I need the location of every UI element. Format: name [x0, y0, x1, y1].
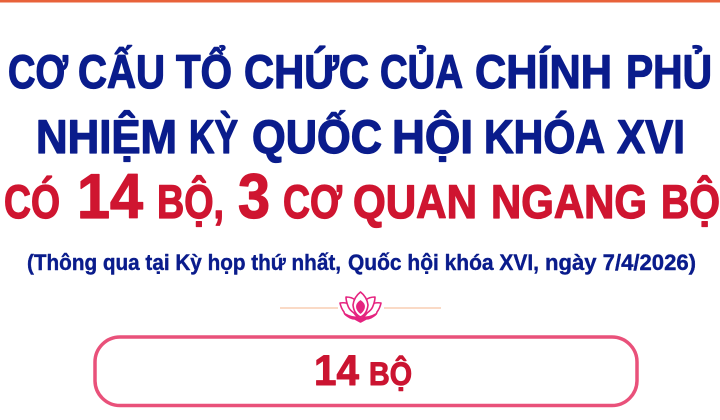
- icon: lotus: [340, 292, 381, 322]
- title line 1: CẤU: [78, 45, 165, 98]
- title line 2: XVI: [617, 110, 685, 163]
- title line 1: TỔ: [176, 45, 232, 98]
- top accent bar: [0, 0, 720, 2]
- title line 2: QUỐC: [252, 110, 382, 163]
- title line 3: ministries count: CƠ: [283, 175, 343, 228]
- panel: 14 ministries heading box: [95, 337, 637, 406]
- box label: 14: [314, 347, 359, 395]
- title line 3: ministries count: [4, 162, 720, 232]
- title line 1: [8, 45, 712, 98]
- title line 3: ministries count: NGANG: [491, 175, 647, 228]
- title line 2: KỲ: [189, 110, 238, 163]
- box label: [314, 347, 412, 395]
- subtitle: Quốc hội khóa XVI,: [348, 250, 539, 275]
- title line 1: CHỨC: [244, 45, 369, 98]
- title line 1: CHÍNH: [475, 45, 612, 98]
- divider with lotus: [280, 292, 441, 322]
- title line 3: ministries count: 3: [238, 162, 270, 232]
- title line 1: CỦA: [380, 45, 463, 98]
- subtitle: ngày 7/4/2026): [545, 250, 696, 275]
- title line 3: ministries count: BỘ,: [157, 175, 224, 228]
- subtitle: [27, 250, 696, 275]
- title line 3: ministries count: CÓ: [4, 175, 60, 228]
- title line 2: NHIỆM: [36, 110, 177, 163]
- title line 1: CƠ: [8, 45, 69, 98]
- title line 3: ministries count: QUAN: [353, 175, 477, 228]
- title line 2: [36, 110, 685, 163]
- title line 2: KHÓA: [484, 110, 605, 163]
- title line 3: ministries count: 14: [77, 162, 143, 232]
- title line 2: HỘI: [392, 110, 473, 163]
- subtitle: (Thông qua tại Kỳ họp thứ nhất,: [27, 250, 341, 275]
- box label: BỘ: [369, 356, 412, 392]
